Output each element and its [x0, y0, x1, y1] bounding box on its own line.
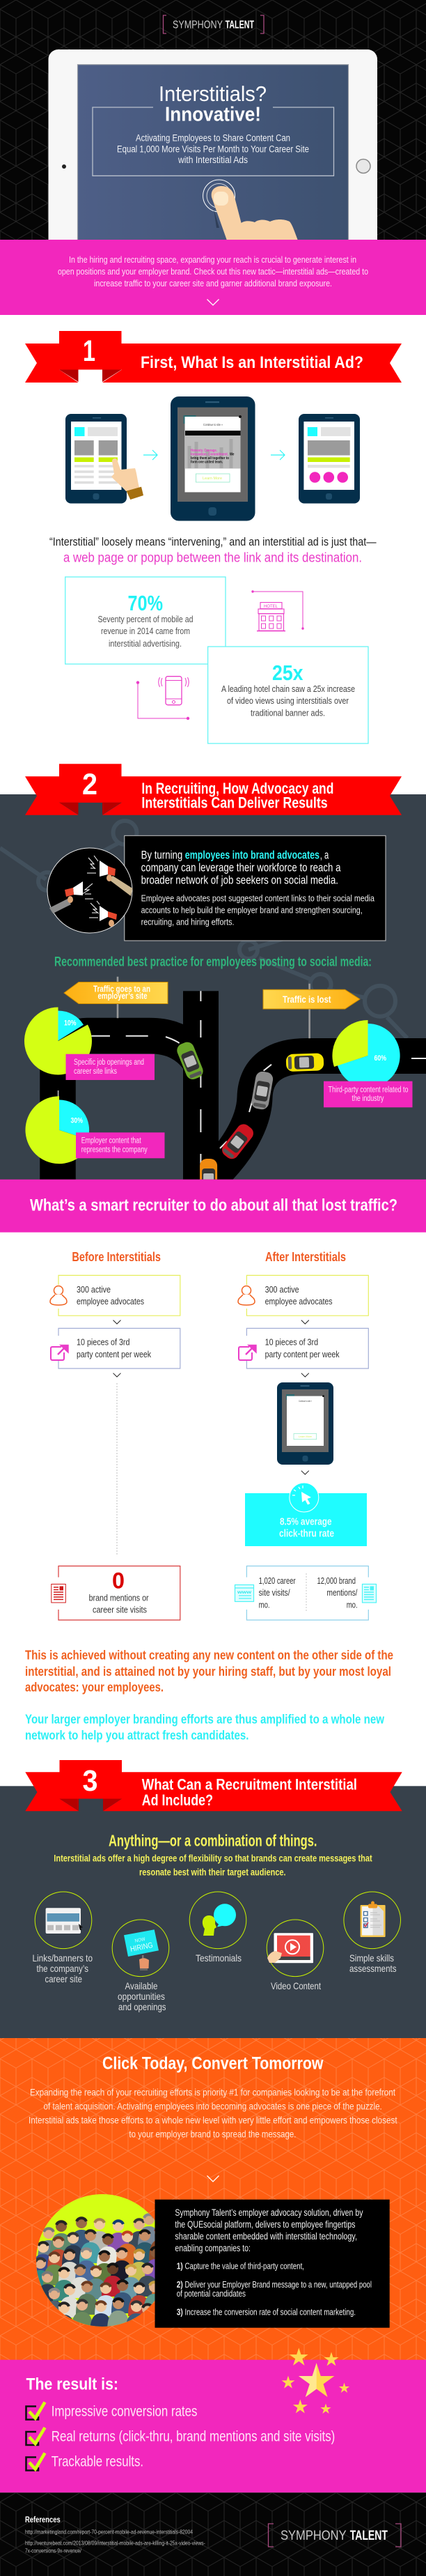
- pie chart: 30%: 30%: [71, 1117, 83, 1125]
- logo: Symphony Talent: SYMPHONY: [281, 2529, 347, 2543]
- heading: Before Interstitials: [72, 1250, 161, 1264]
- item: available opportunities: NOW: [134, 1937, 146, 1944]
- solution text box: Deliver your Employer Brand message to a new, untapped pool: [185, 2280, 372, 2290]
- content box: party content per week: [265, 1349, 340, 1359]
- center tablet with interstitial: bring them all together to: [191, 456, 229, 461]
- advocacy text box: employees into brand advocates: [185, 848, 320, 861]
- heading: The result is:: [26, 2375, 118, 2393]
- solution text box: enabling companies to:: [175, 2243, 251, 2253]
- icon: chevron: [301, 1320, 309, 1324]
- tablet with interstitial: Continue to site »: [299, 1400, 312, 1403]
- stat card: 70%: interstitial advertising.: [109, 638, 182, 649]
- label: specific job openings: Specific job openings and: [74, 1058, 144, 1067]
- network background decoration: [0, 821, 407, 1038]
- icon: hotel with connector: HOTEL: [264, 604, 278, 609]
- paragraph: [29, 2087, 397, 2140]
- item: available opportunities: opportunities: [118, 1991, 165, 2002]
- center tablet with interstitial: Learn More: [203, 477, 222, 481]
- hero subtitle: [117, 133, 309, 165]
- center tablet with interstitial: Continue to site »: [203, 423, 223, 426]
- advocates box: [50, 1275, 180, 1316]
- result box: brand mentions or: [89, 1593, 149, 1603]
- icon: chevron down: [207, 300, 219, 305]
- panel: advocacy and traffic: [0, 794, 426, 1180]
- section 1 ribbon: First, What Is an Interstitial Ad?: [141, 353, 363, 372]
- left tablet: [65, 414, 143, 503]
- advocacy text box: [125, 835, 386, 941]
- advocates box: employee advocates: [265, 1296, 333, 1306]
- sign: traffic is lost: [263, 984, 360, 1038]
- content box: [239, 1328, 368, 1368]
- solution text box: Capture the value of third-party content,: [185, 2262, 304, 2272]
- item: links and banners: Links/banners to: [32, 1952, 93, 1964]
- solution text box: Increase the conversion rate of social content marketing.: [185, 2308, 356, 2317]
- advocates box: employee advocates: [77, 1296, 144, 1306]
- conclusion text: orange: advocates: your employees.: [25, 1681, 164, 1695]
- solution text box: 3): [177, 2308, 183, 2317]
- item: available opportunities: HIRING: [129, 1941, 154, 1954]
- checklist: Trackable results.: [52, 2453, 143, 2469]
- advocacy text box: Employee advocates post suggested content links to their social media: [141, 893, 375, 904]
- label: specific job openings: [65, 1054, 155, 1080]
- heading: After Interstitials: [265, 1250, 346, 1264]
- item: links and banners: [32, 1892, 93, 1984]
- icon: chevron: [113, 1373, 121, 1377]
- checklist: Impressive conversion rates: [52, 2404, 197, 2420]
- item: skills assessments: [344, 1892, 401, 1974]
- stat card: 70%: Seventy percent of mobile ad: [97, 614, 194, 624]
- illustration: crowd of employees: [36, 2194, 155, 2327]
- roads: [58, 991, 426, 1181]
- result box: www: [237, 1590, 252, 1595]
- heading: anything or a combination: Anything—or a combination of things.: [109, 1831, 317, 1849]
- diagram: tablet flow: [65, 396, 360, 521]
- hero title: [93, 82, 334, 176]
- panel: click today, convert tomorrow: [0, 2038, 426, 2360]
- advocacy text box: broader network of job seekers on social media.: [141, 873, 338, 886]
- stat card: 25x: [208, 647, 368, 743]
- advocates box: 300 active: [265, 1284, 299, 1295]
- label: employer content: [76, 1132, 164, 1158]
- advocacy text box: accounts to help build the employer brand and strengthen sourcing,: [141, 905, 363, 916]
- advocacy text box: company can leverage their workforce to reach a: [141, 861, 341, 874]
- references: References: [25, 2515, 61, 2524]
- icon: chevron: [301, 1373, 309, 1377]
- result box: mentions/: [327, 1587, 358, 1598]
- cars: [177, 1042, 324, 1180]
- hero subtitle: Activating Employees to Share Content Can: [136, 133, 290, 144]
- icon: stars: [281, 2348, 349, 2414]
- column: after interstitials: [235, 1250, 376, 1620]
- heading: anything or a combination: [54, 1831, 372, 1878]
- item: testimonials: Testimonials: [196, 1952, 242, 1964]
- icon: chevron down: [207, 2175, 219, 2182]
- sign: traffic goes to an employer's site: Traffic goes to an: [93, 983, 150, 994]
- advocacy text box: By turning: [141, 848, 182, 861]
- stat card: 25x: traditional banner ads.: [251, 707, 325, 718]
- logo: Symphony Talent: TALENT: [350, 2529, 388, 2543]
- advocacy text box: recruiting, and hiring efforts.: [141, 917, 234, 927]
- pie chart: 60%: 60%: [374, 1054, 386, 1063]
- sign: traffic goes to an employer's site: [64, 977, 168, 1018]
- intro text: [58, 254, 368, 288]
- item: video content: Video Content: [271, 1980, 321, 1991]
- stat card: 25x: 25x: [272, 661, 303, 685]
- stat card: 25x: A leading hotel chain saw a 25x increase: [221, 684, 355, 694]
- panel: the result: [0, 2348, 426, 2492]
- result box: mo.: [259, 1600, 270, 1610]
- right tablet: [299, 414, 360, 503]
- definition text: “Interstitial” loosely means “intervening,” and an interstitial ad is just that—: [49, 536, 377, 548]
- item: available opportunities: and openings: [118, 2001, 166, 2012]
- item: available opportunities: [112, 1920, 169, 2012]
- item: testimonials: [189, 1892, 246, 1964]
- road dashes: [92, 991, 426, 1180]
- item: available opportunities: Available: [125, 1980, 158, 1991]
- conclusion text: cyan: [25, 1713, 385, 1743]
- road illustration: [24, 977, 426, 1196]
- result box: 0: [112, 1568, 125, 1594]
- label: third-party content: [324, 1081, 412, 1107]
- hero subtitle: with Interstitial Ads: [178, 155, 248, 165]
- label: specific job openings: career site links: [74, 1067, 117, 1076]
- arrow: [271, 450, 285, 460]
- center tablet with interstitial: [171, 396, 255, 521]
- content box: [51, 1328, 180, 1368]
- pie chart: 10%: [24, 1008, 92, 1074]
- solution text box: 1): [177, 2262, 183, 2272]
- section 3 ribbon: Ad Include?: [142, 1791, 213, 1809]
- hero panel: [0, 0, 426, 240]
- tablet illustration: [49, 49, 377, 240]
- result box: site visits/: [259, 1587, 290, 1598]
- advocacy text box: , a: [320, 848, 329, 861]
- center tablet with interstitial: Innovation. Commitment.: [191, 453, 229, 457]
- result box: 12,000 brand: [317, 1575, 356, 1586]
- solution text box: sharable content embedded with interstitial technology,: [175, 2231, 357, 2242]
- label: employer content: represents the company: [81, 1146, 148, 1154]
- center tablet with interstitial: Honesty. Courage.: [191, 449, 218, 453]
- hero title: Innovative!: [165, 103, 261, 125]
- section 3 ribbon: What Can a Recruitment Interstitial: [142, 1775, 357, 1793]
- stat card: 70%: 70%: [128, 591, 163, 615]
- center tablet with interstitial: form one united team.: [191, 460, 223, 464]
- heading: anything or a combination: resonate best with their target audience.: [139, 1867, 286, 1878]
- conclusion text: orange: [25, 1649, 393, 1695]
- icon: megaphones circle: [47, 848, 132, 933]
- label: third-party content: the industry: [352, 1095, 384, 1103]
- banner: lost traffic question: [0, 1180, 426, 1233]
- center tablet with interstitial: We: [230, 453, 235, 457]
- stat card: 70%: revenue in 2014 came from: [101, 626, 190, 636]
- conclusion text: cyan: network to help you attract fresh candidates.: [25, 1729, 249, 1743]
- advocates box: 300 active: [77, 1284, 111, 1295]
- intro text: In the hiring and recruiting space, expanding your reach is crucial to generate interest in: [69, 254, 356, 265]
- section 2 ribbon: Interstitials Can Deliver Results: [141, 794, 328, 812]
- section 3 ribbon: [25, 1760, 402, 1811]
- item: links and banners: the company’s: [36, 1963, 88, 1974]
- logo: Symphony Talent: [163, 15, 264, 33]
- icon: tapping finger: [203, 180, 298, 240]
- hero title: Interstitials?: [159, 82, 267, 106]
- solution text box: of potential candidates: [177, 2289, 246, 2299]
- logo: Symphony Talent: TALENT: [226, 20, 254, 31]
- stat card: 25x: of video views using interstitials over: [227, 695, 349, 706]
- item: video content: [267, 1920, 324, 1991]
- references: 7x-conversions-9x-revenue/: [25, 2547, 81, 2554]
- stat card: 70%: [65, 577, 226, 664]
- logo: Symphony Talent: SYMPHONY: [173, 20, 223, 31]
- column: before interstitials: [50, 1250, 180, 1620]
- pie chart: 60%: [332, 1020, 400, 1088]
- icon: chevron: [301, 1471, 309, 1474]
- tablet with interstitial: [277, 1382, 333, 1465]
- section 1 ribbon: [25, 331, 402, 383]
- panel: what an ad can include: [0, 1786, 426, 2038]
- logo: Symphony Talent: [269, 2524, 401, 2547]
- intro text: increase traffic to your career site and garner additional brand exposure.: [94, 278, 332, 288]
- section 2 ribbon: In Recruiting, How Advocacy and: [141, 780, 333, 797]
- solution text box: 2): [177, 2280, 183, 2290]
- label: employer content: Employer content that: [81, 1137, 141, 1146]
- result box: [52, 1566, 180, 1620]
- result box: 1,020 career: [259, 1575, 296, 1586]
- solution text box: Symphony Talent’s employer advocacy solution, driven by: [175, 2207, 363, 2218]
- heading: Click Today, Convert Tomorrow: [102, 2053, 324, 2073]
- dotted connector: [116, 1383, 118, 1556]
- result box: career site visits: [93, 1605, 147, 1615]
- sign: traffic is lost: Traffic is lost: [283, 994, 331, 1005]
- section 3 ribbon: 3: [82, 1764, 97, 1798]
- result box: mo.: [347, 1600, 358, 1610]
- checklist: [26, 2403, 335, 2471]
- icon: chevron: [113, 1320, 121, 1324]
- intro band: [0, 240, 426, 315]
- references: http://venturebeat.com/2013/08/09/interstitial-mobile-ads-are-killing-it-25x-video-views-: [25, 2540, 205, 2547]
- pie chart: 30%: [25, 1090, 91, 1164]
- definition text: [49, 536, 377, 565]
- arrow: [143, 450, 157, 460]
- content box: 10 pieces of 3rd: [77, 1337, 129, 1348]
- icon: phone with connector: [136, 677, 189, 720]
- content box: 10 pieces of 3rd: [265, 1337, 318, 1348]
- paragraph: to your employer brand to spread the message.: [129, 2129, 296, 2140]
- section 2 ribbon: [25, 764, 402, 815]
- section 2 ribbon: 2: [82, 768, 97, 801]
- advocates box: [238, 1275, 368, 1316]
- click-thru rate box: click-thru rate: [279, 1528, 334, 1540]
- references: http://marketingland.com/report-70-percent-mobile-ad-revenue-interstitials-82004: [25, 2529, 193, 2536]
- pie chart: 10%: 10%: [64, 1019, 77, 1028]
- item: links and banners: career site: [45, 1973, 82, 1984]
- tablet with interstitial: Learn More: [299, 1435, 312, 1438]
- item: skills assessments: assessments: [349, 1963, 397, 1974]
- checklist: Real returns (click-thru, brand mentions and site visits): [52, 2428, 335, 2444]
- section 1 ribbon: 1: [83, 334, 95, 368]
- click-thru rate box: 8.5% average: [280, 1516, 331, 1528]
- content box: party content per week: [77, 1349, 151, 1359]
- item: skills assessments: Simple skills: [349, 1952, 394, 1964]
- definition text: a web page or popup between the link and its destination.: [63, 550, 362, 565]
- hero subtitle: Equal 1,000 More Visits Per Month to Your Career Site: [117, 144, 309, 154]
- solution text box: [155, 2200, 390, 2328]
- result box: [235, 1566, 376, 1620]
- solution text box: the QUEsocial platform, delivers to employee fingertips: [175, 2219, 356, 2230]
- footer panel: [0, 2492, 426, 2576]
- icon: hotel with connector: [251, 590, 304, 631]
- sign: traffic goes to an employer's site: employer’s site: [97, 991, 148, 1001]
- click-thru rate box: [245, 1483, 367, 1546]
- references: [25, 2515, 205, 2554]
